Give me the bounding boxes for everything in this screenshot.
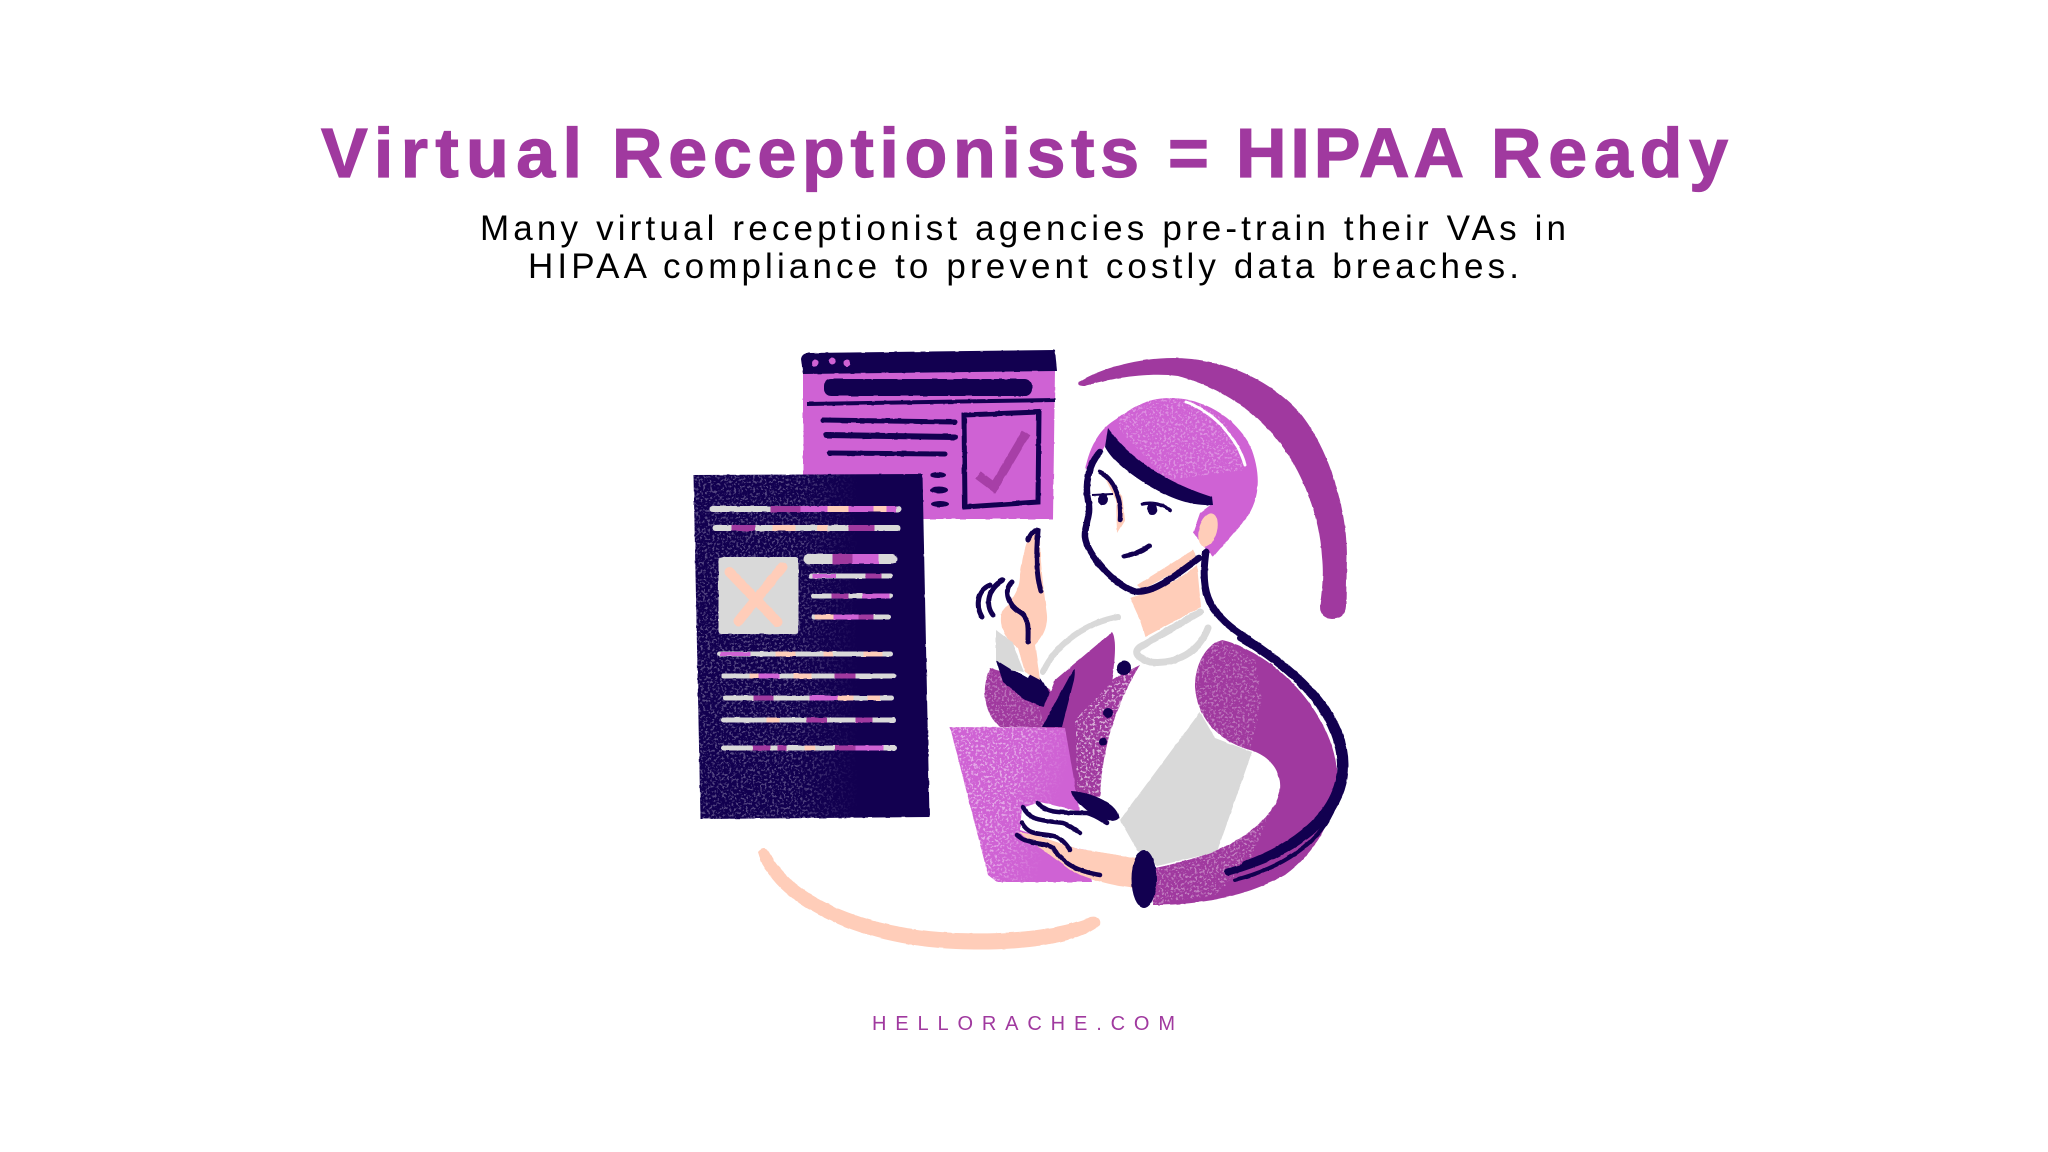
check box xyxy=(964,412,1039,507)
illustration: receptionist with documents xyxy=(694,350,1347,950)
subtitle: HIPAA compliance to prevent costly data breaches. xyxy=(528,247,1519,286)
document text lines xyxy=(712,509,898,748)
lower hand xyxy=(1020,802,1137,858)
collar xyxy=(1137,612,1208,662)
jacket brush texture xyxy=(1075,665,1140,797)
left eye xyxy=(1092,493,1113,505)
document image placeholder xyxy=(718,557,798,634)
title xyxy=(321,114,1728,192)
jacket front xyxy=(1040,632,1140,797)
lower sleeve texture xyxy=(1153,790,1280,905)
lower arm xyxy=(1018,832,1137,888)
chin shadow xyxy=(1137,550,1198,590)
buttons xyxy=(1099,661,1131,746)
panel: dark document xyxy=(694,474,930,819)
hair texture xyxy=(1118,398,1245,480)
ear xyxy=(1195,511,1221,549)
window divider xyxy=(807,400,1055,404)
window title bar xyxy=(801,350,1057,374)
check mark xyxy=(978,433,1026,487)
title: HIPAA xyxy=(1236,114,1464,192)
dark lapel xyxy=(1042,670,1075,727)
document sheet xyxy=(694,474,930,819)
clipboard xyxy=(950,727,1092,882)
title: Virtual xyxy=(321,114,582,192)
purple arc behind head xyxy=(1078,358,1347,619)
clipboard texture xyxy=(950,726,1068,882)
nose shadow xyxy=(1105,478,1125,533)
title: Receptionists xyxy=(612,114,1139,192)
gray shirt cuff xyxy=(996,630,1024,672)
brow line xyxy=(1100,472,1120,520)
window body xyxy=(803,369,1055,519)
hair highlight xyxy=(1186,402,1245,465)
peach arc below xyxy=(758,848,1100,950)
window small dashes xyxy=(930,472,949,507)
gray arm line xyxy=(1043,617,1118,672)
mouth xyxy=(1124,546,1149,556)
footer: website: HELLORACHE.COM xyxy=(872,1013,1175,1035)
hand strokes xyxy=(978,531,1041,642)
cuff left xyxy=(996,660,1050,707)
ponytail xyxy=(1204,552,1345,880)
raised hand xyxy=(1001,532,1047,680)
window heading bar xyxy=(824,379,1032,396)
window text lines xyxy=(823,420,955,454)
title: = xyxy=(1168,114,1209,192)
left sleeve texture xyxy=(985,668,1045,727)
right eye xyxy=(1142,503,1170,515)
thumb xyxy=(1071,791,1119,821)
hair xyxy=(1085,398,1258,557)
gray torso shadow xyxy=(1120,712,1252,866)
bangs xyxy=(1105,428,1213,505)
neck xyxy=(1130,565,1201,637)
face outline xyxy=(1085,452,1199,592)
document texture xyxy=(694,474,851,820)
subtitle: Many virtual receptionist agencies pre-train their VAs in xyxy=(480,209,1566,248)
panel: browser window with check xyxy=(801,350,1057,519)
right sleeve xyxy=(1153,640,1337,905)
fingers xyxy=(1017,803,1107,875)
title: Ready xyxy=(1491,114,1728,192)
figure: receptionist xyxy=(950,398,1345,908)
left sleeve xyxy=(985,668,1066,728)
subtitle xyxy=(480,209,1566,286)
cuff right xyxy=(1132,850,1156,908)
right sleeve texture xyxy=(1195,640,1262,750)
window dots xyxy=(812,358,850,366)
